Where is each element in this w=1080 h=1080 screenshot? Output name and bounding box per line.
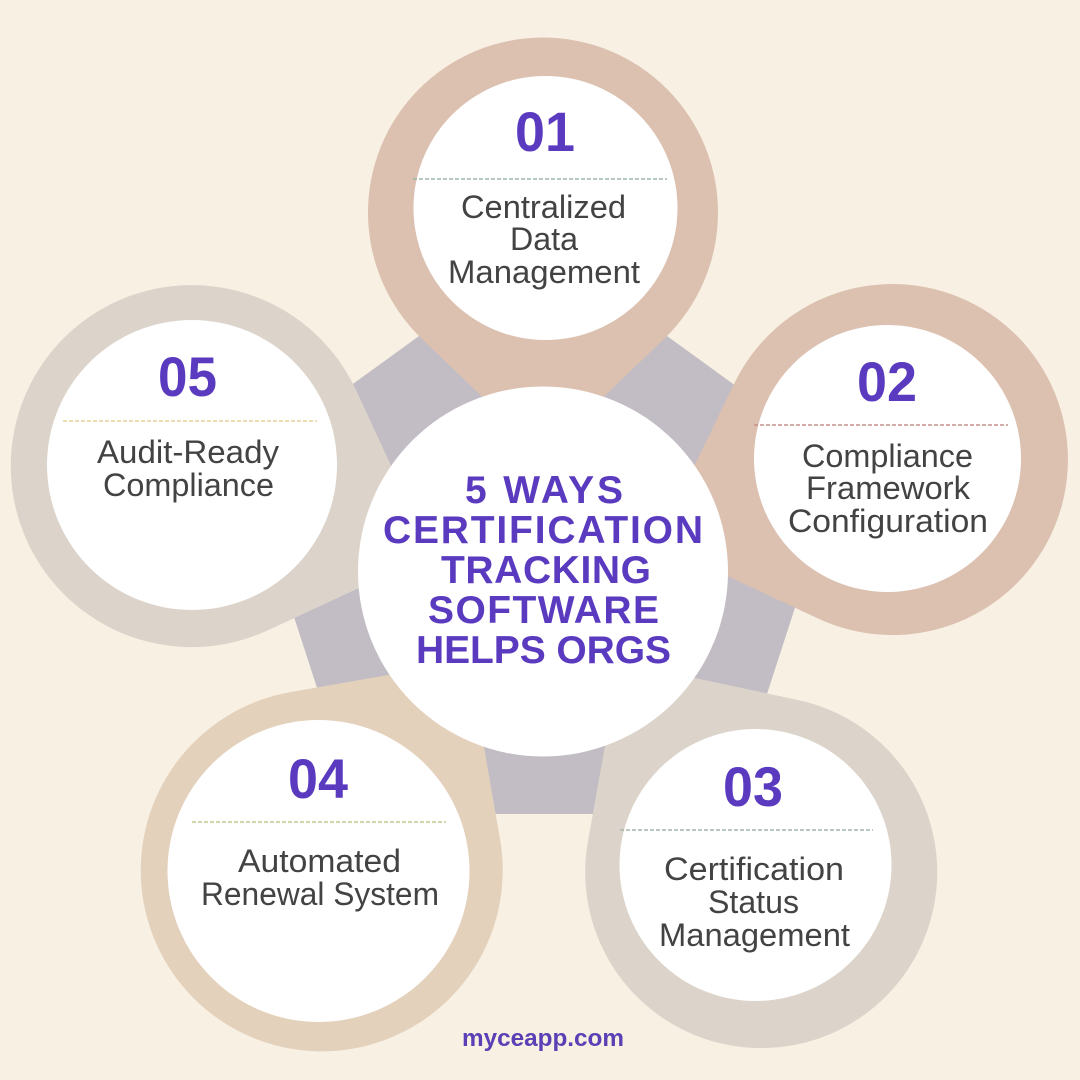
central circle with title <box>358 386 728 756</box>
panel: 03 certification status management: Certification <box>664 851 844 887</box>
panel: 04 automated renewal system: 04 <box>288 747 348 810</box>
central circle with title: TRACKING <box>441 549 651 592</box>
panel: 03 certification status management: 03 <box>723 755 783 818</box>
panel: 01 centralized data management: 01 <box>515 100 575 163</box>
panel: 03 certification status management: Status <box>708 884 799 920</box>
footer website: myceapp.com <box>462 1025 624 1052</box>
panel: 01 centralized data management: Centralized <box>461 189 626 225</box>
central circle with title: SOFTWARE <box>428 589 659 632</box>
panel: 04 automated renewal system <box>141 661 503 1051</box>
central pentagon <box>244 246 842 814</box>
panel: 05 audit-ready compliance: Compliance <box>103 467 274 503</box>
panel: 04 automated renewal system: Renewal System <box>201 876 439 912</box>
panel: 02 compliance framework configuration <box>657 284 1068 635</box>
panel: 02 compliance framework configuration: Compliance <box>802 438 973 474</box>
panel: 02 compliance framework configuration: Configuration <box>788 503 988 539</box>
central circle with title: 5 WAYS <box>465 469 623 512</box>
panel: 03 certification status management <box>585 662 937 1048</box>
panel: 01 centralized data management: Data <box>510 221 578 257</box>
panel: 02 compliance framework configuration: Framework <box>806 470 971 506</box>
central circle with title: HELPS ORGS <box>416 629 671 672</box>
panel: 01 centralized data management <box>368 38 718 455</box>
panel: 02 compliance framework configuration: 02 <box>857 350 917 413</box>
panel: 05 audit-ready compliance <box>11 285 432 647</box>
panel: 05 audit-ready compliance: Audit-Ready <box>97 434 279 470</box>
panel: 04 automated renewal system: Automated <box>238 843 401 879</box>
panel: 01 centralized data management: Management <box>448 254 640 290</box>
central circle with title: CERTIFICATION <box>383 509 703 552</box>
panel: 05 audit-ready compliance: 05 <box>158 345 217 408</box>
panel: 03 certification status management: Management <box>659 917 850 953</box>
